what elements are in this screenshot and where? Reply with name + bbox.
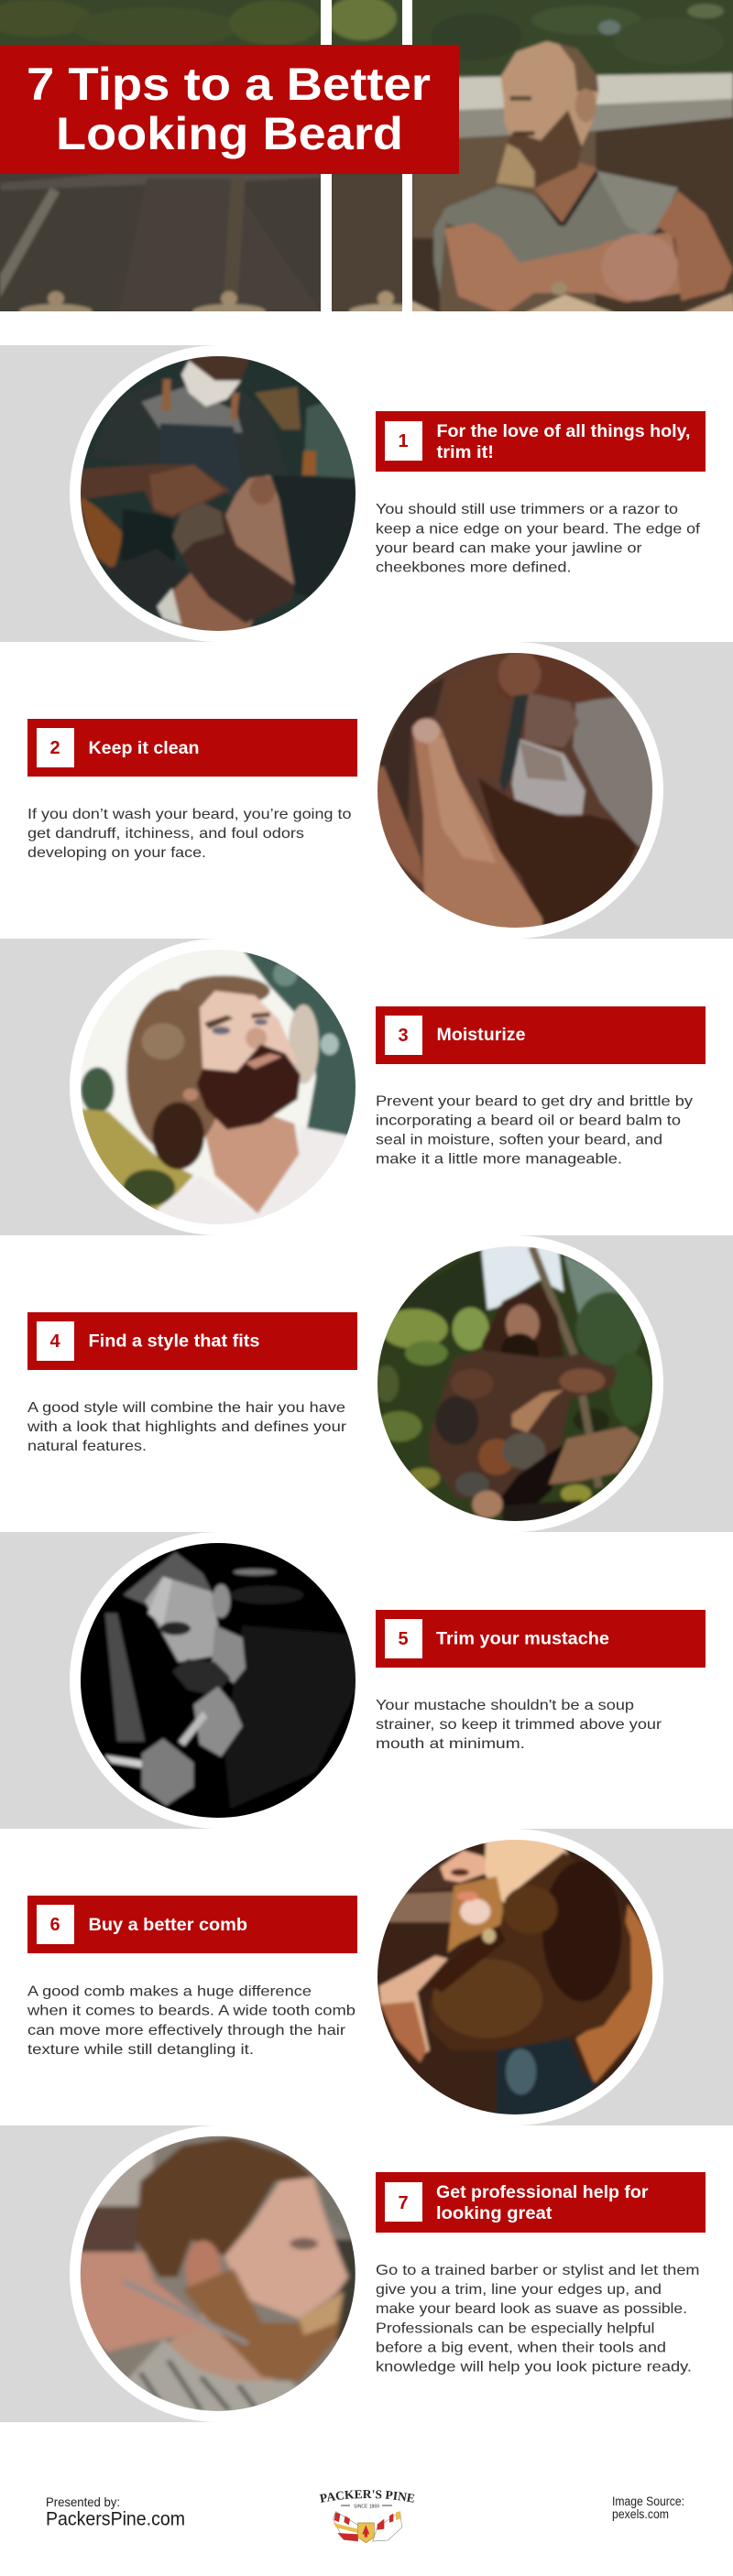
step 2 heading bar: Keep it clean xyxy=(88,739,200,758)
step 7 heading bar xyxy=(376,2172,706,2233)
step 5 body text: Your mustache shouldn't be a soup xyxy=(376,1698,634,1713)
step 1 body text xyxy=(376,502,701,575)
panel: tip 7 xyxy=(0,2125,706,2423)
step 2 body text: If you don’t wash your beard, you’re going to xyxy=(27,807,352,822)
footer: presented by: PackersPine.com xyxy=(46,2509,185,2529)
step 4 heading bar: Find a style that fits xyxy=(88,1331,260,1352)
step 6 heading bar: 6 xyxy=(49,1915,60,1935)
step 4 body text: natural features. xyxy=(27,1439,147,1454)
step 5 body text xyxy=(376,1698,662,1752)
footer: image source: pexels.com xyxy=(612,2507,669,2521)
step 3 heading bar: Moisturize xyxy=(436,1026,526,1045)
step 3 heading bar: 3 xyxy=(398,1026,409,1046)
footer: presented by xyxy=(46,2494,185,2529)
step 4 heading bar xyxy=(27,1312,357,1370)
hero photo: bearded man in front of tent xyxy=(0,0,733,330)
step 3 heading bar xyxy=(376,1006,706,1064)
title banner xyxy=(0,45,459,174)
panel: tip 4 xyxy=(27,1231,733,1537)
photo: combing a curly beard xyxy=(377,1840,652,2114)
step 4 body text: with a look that highlights and defines your xyxy=(27,1419,347,1435)
step 6 heading bar xyxy=(27,1896,357,1953)
step 7 body text: give you a trim, line your edges up, and xyxy=(376,2282,662,2298)
step 3 body text: seal in moisture, soften your beard, and xyxy=(376,1132,662,1148)
step 6 heading bar: Buy a better comb xyxy=(88,1916,247,1935)
step 5 heading bar xyxy=(376,1610,706,1668)
step 3 body text: make it a little more manageable. xyxy=(376,1152,622,1167)
step 2 heading bar: 2 xyxy=(49,738,60,758)
panel: tip 2 xyxy=(27,637,733,943)
step 7 body text: make your beard look as suave as possible. xyxy=(376,2301,687,2317)
footer: image source: Image Source: xyxy=(612,2494,684,2508)
step 5 body text: mouth at minimum. xyxy=(376,1736,525,1752)
step 7 heading bar: 7 xyxy=(398,2193,409,2213)
step 1 body text: You should still use trimmers or a razor to xyxy=(376,502,678,517)
step 2 body text: developing on your face. xyxy=(27,845,206,861)
step 7 body text: before a big event, when their tools and xyxy=(376,2341,666,2355)
panel: tip 3 xyxy=(0,934,706,1240)
step 7 heading bar: looking great xyxy=(436,2204,552,2223)
photo: man sitting in forest xyxy=(377,1246,652,1521)
step 2 body text xyxy=(27,807,352,861)
step 6 body text: can move more effectively through the hair xyxy=(27,2023,346,2038)
step 1 body text: your beard can make your jawline or xyxy=(376,540,642,557)
step 1 heading bar: For the love of all things holy, xyxy=(436,422,691,441)
step 1 heading bar: 1 xyxy=(398,431,409,451)
step 5 heading bar: 5 xyxy=(398,1629,409,1649)
footer: presented by: Presented by: xyxy=(46,2494,120,2509)
step 5 heading bar: Trim your mustache xyxy=(436,1630,609,1648)
step 2 body text: get dandruff, itchiness, and foul odors xyxy=(27,826,304,842)
step 2 heading bar xyxy=(27,719,357,777)
step 1 heading bar xyxy=(376,411,706,472)
footer: image source xyxy=(612,2494,684,2521)
step 3 body text xyxy=(376,1093,693,1167)
step 6 body text xyxy=(27,1984,356,2058)
logo: Packer's Pine crest: SINCE 1869 xyxy=(354,2504,379,2509)
step 4 heading bar: 4 xyxy=(49,1331,60,1352)
photo: razor shaving along beard line xyxy=(377,653,652,928)
panel: tip 6 xyxy=(27,1824,733,2130)
logo: Packer's Pine crest: PACKER'S PINE xyxy=(319,2490,414,2503)
step 7 body text: knowledge will help you look picture ready. xyxy=(376,2359,692,2375)
photo: barber trimming beard with scissors xyxy=(81,2136,356,2411)
step 6 body text: A good comb makes a huge difference xyxy=(27,1984,312,2000)
step 4 body text xyxy=(27,1400,347,1454)
step 5 body text: strainer, so keep it trimmed above your xyxy=(376,1717,662,1733)
panel: tip 1 xyxy=(0,341,706,647)
title banner: 7 Tips to a Better xyxy=(27,59,431,110)
step 1 heading bar: trim it! xyxy=(436,443,494,462)
step 4 body text: A good style will combine the hair you have xyxy=(27,1400,345,1416)
panel: tip 5 xyxy=(0,1527,706,1833)
step 7 heading bar: Get professional help for xyxy=(436,2183,649,2202)
step 3 body text: incorporating a beard oil or beard balm to xyxy=(376,1114,681,1128)
step 7 body text: Go to a trained barber or stylist and let them xyxy=(376,2263,700,2278)
step 1 body text: keep a nice edge on your beard. The edge of xyxy=(376,522,701,537)
step 3 body text: Prevent your beard to get dry and brittle by xyxy=(376,1093,693,1110)
step 7 body text: Professionals can be especially helpful xyxy=(376,2321,654,2337)
step 6 body text: when it comes to beards. A wide tooth comb xyxy=(27,2004,356,2018)
photo: barber trimming beard xyxy=(81,356,356,631)
photo: black and white man with straight razor xyxy=(81,1543,356,1818)
logo: Packer's Pine crest xyxy=(319,2490,414,2544)
step 1 body text: cheekbones more defined. xyxy=(376,560,572,575)
title banner: Looking Beard xyxy=(56,108,403,159)
photo: long-haired man looking up xyxy=(81,950,356,1224)
step 7 body text xyxy=(376,2263,700,2375)
step 6 body text: texture while still detangling it. xyxy=(27,2042,254,2058)
